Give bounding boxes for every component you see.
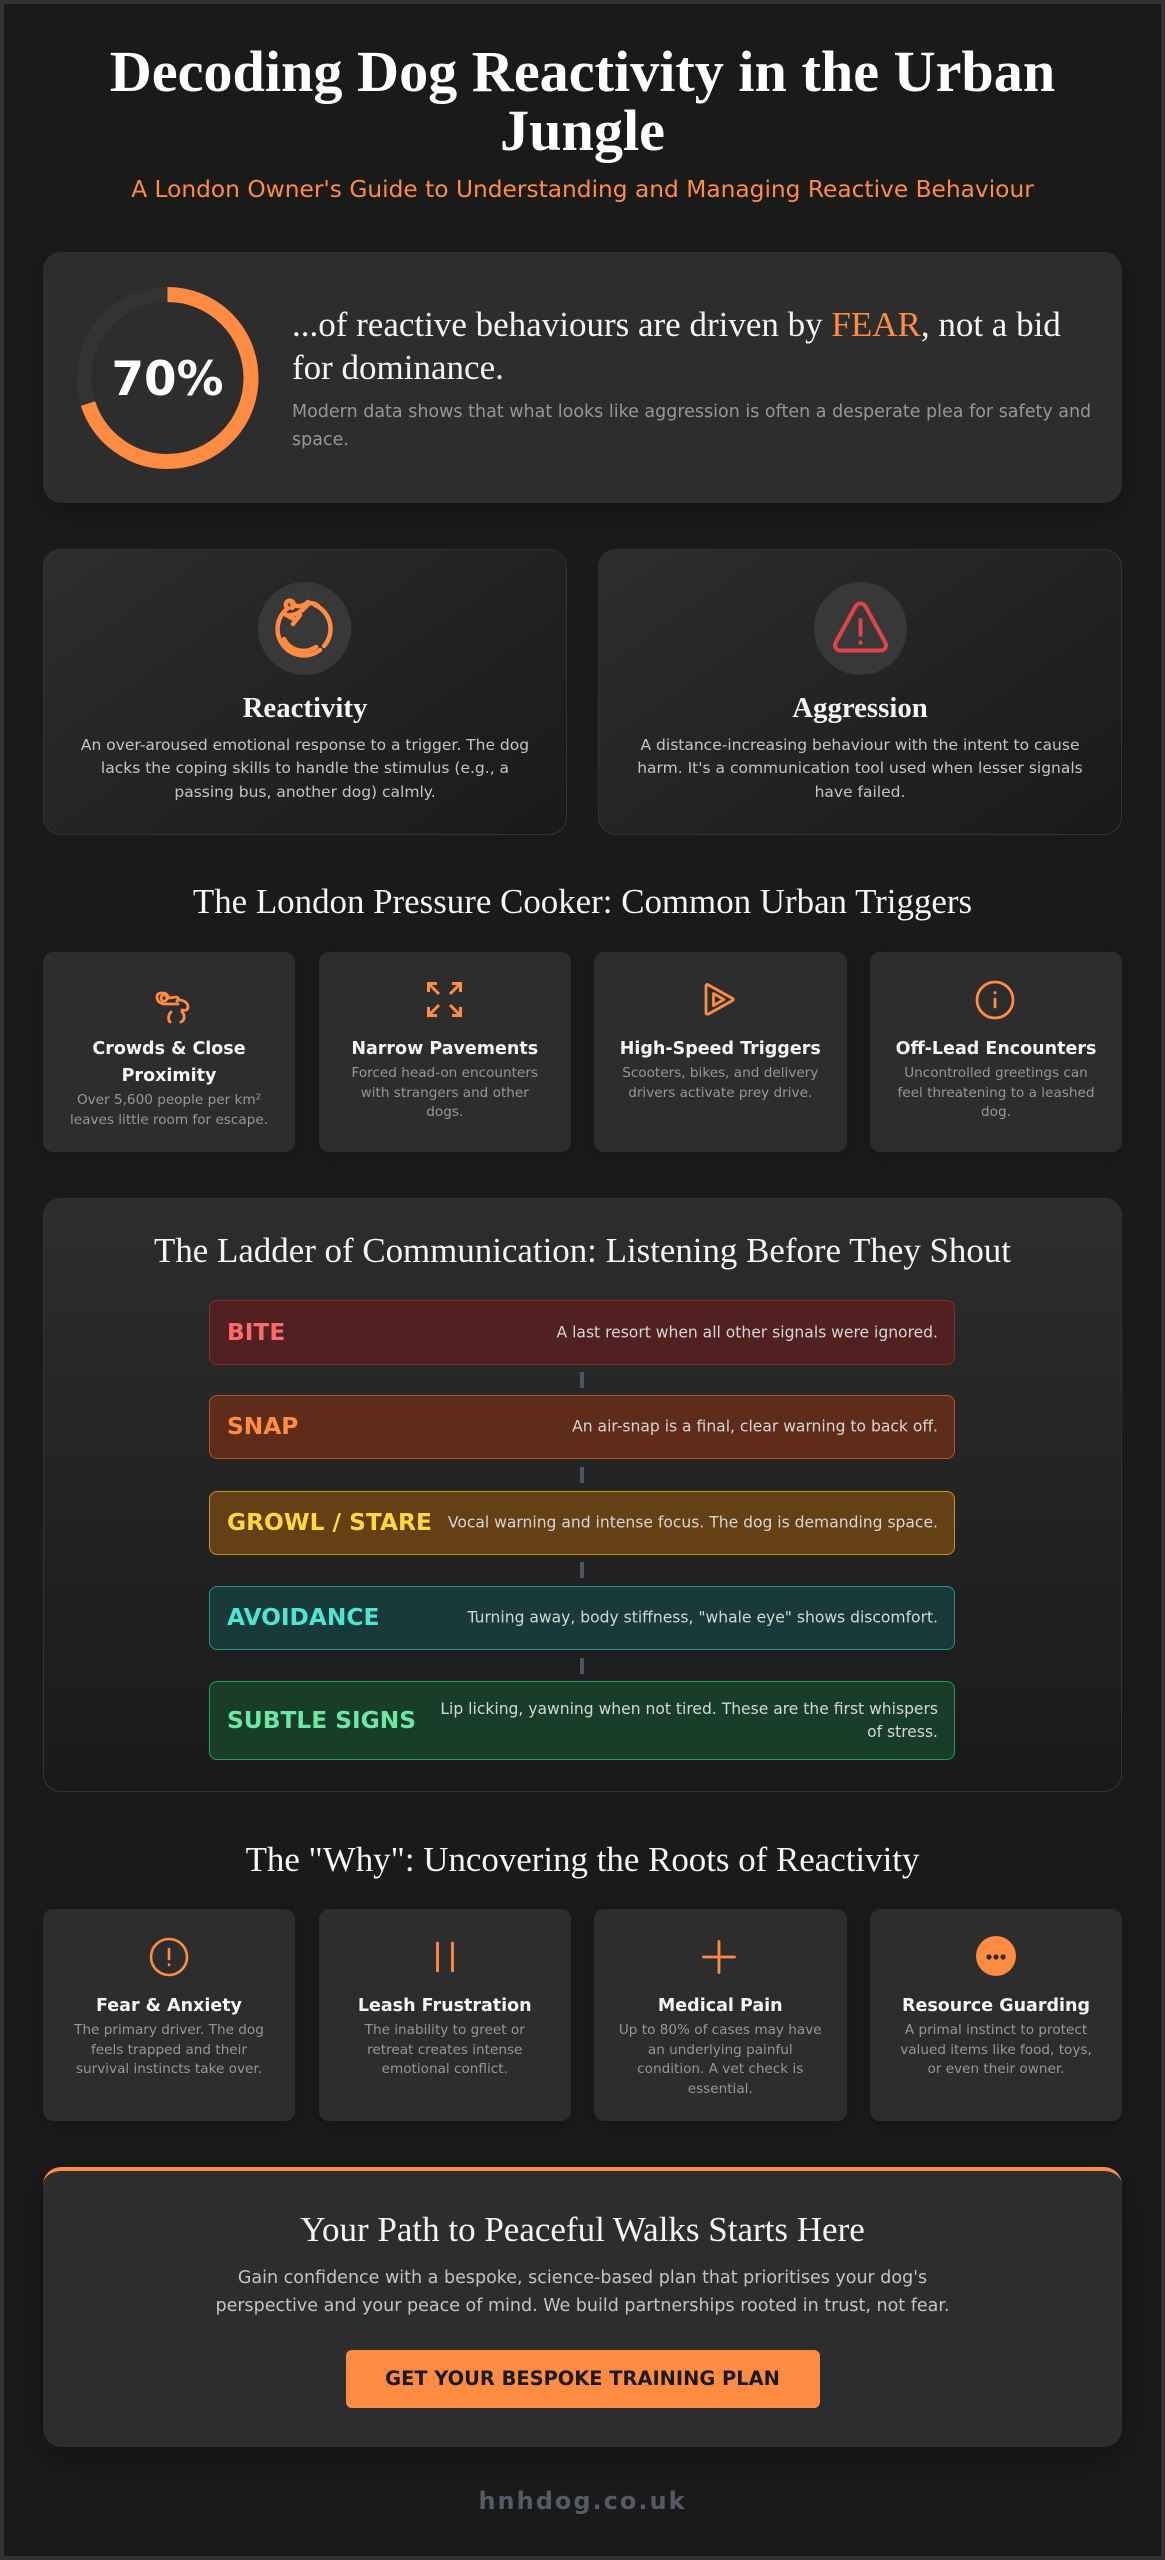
panel: crowds trigger — [43, 952, 295, 1152]
text: off-lead — [898, 1065, 1094, 1120]
description: bite: A last resort when all other signals were ignored. — [557, 1323, 938, 1341]
text: resource: or even their owner. — [927, 2061, 1064, 2077]
text: aggression definition: A distance-increasing behaviour with the intent to cause — [641, 736, 1079, 754]
text: cta: Gain confidence with a bespoke, science-based plan that prioritises your dog's — [238, 2268, 927, 2288]
text: leash: emotional conflict. — [382, 2061, 508, 2077]
text: reactivity definition: lacks the coping skills to handle the stimulus (e.g., a — [101, 759, 509, 777]
heading: cta: Your Path to Peaceful Walks Starts Here — [300, 2210, 865, 2249]
rung: subtle signs — [209, 1681, 955, 1760]
description: subtle signs — [440, 1700, 938, 1740]
connector: growl to avoidance — [580, 1562, 584, 1578]
text: medical: an underlying painful — [648, 2042, 793, 2058]
heading: high-speed: High-Speed Triggers — [620, 1039, 821, 1059]
rung: snap — [209, 1395, 955, 1459]
panel: reactivity — [43, 549, 567, 835]
heading: ladder: The Ladder of Communication: Listening Before They Shout — [154, 1230, 1011, 1270]
panel: medical pain — [594, 1909, 846, 2121]
text: high-speed: Scooters, bikes, and delivery — [622, 1065, 818, 1081]
icon: reactivity — [258, 582, 351, 675]
panel: 70% statistic — [43, 252, 1122, 503]
text: crowds: Over 5,600 people per km² — [77, 1092, 261, 1108]
text: off-lead: Uncontrolled greetings can — [904, 1065, 1088, 1081]
text: pavements — [352, 1065, 538, 1120]
text: pavements: dogs. — [426, 1104, 463, 1120]
icon: dots circle — [976, 1936, 1016, 1976]
text: resource: valued items like food, toys, — [900, 2042, 1092, 2058]
icon: play — [704, 983, 735, 1016]
text: crowds: leaves little room for escape. — [70, 1112, 268, 1128]
icon: exclamation circle — [150, 1938, 188, 1976]
label: growl: GROWL / STARE — [227, 1509, 432, 1536]
text: resource: A primal instinct to protect — [905, 2022, 1087, 2038]
text: fear: The primary driver. The dog — [74, 2022, 264, 2038]
text: cta — [215, 2268, 950, 2316]
chart: 70% donut — [80, 287, 258, 469]
heading: aggression: Aggression — [792, 692, 928, 724]
panel: high-speed trigger — [594, 952, 846, 1152]
label: subtle signs: SUBTLE SIGNS — [227, 1706, 416, 1734]
label: bite: BITE — [227, 1318, 285, 1346]
icon: plus — [702, 1940, 736, 1974]
heading: fear: Fear & Anxiety — [96, 1996, 242, 2016]
heading: crowds — [92, 1039, 246, 1086]
label: avoidance: AVOIDANCE — [227, 1604, 379, 1631]
text: high-speed: drivers activate prey drive. — [628, 1084, 812, 1100]
button — [346, 2350, 820, 2408]
button: GET YOUR BESPOKE TRAINING PLAN — [385, 2367, 780, 2390]
description: avoidance: Turning away, body stiffness, "whale eye" shows discomfort. — [467, 1608, 938, 1626]
description: growl: Vocal warning and intense focus. The dog is demanding space. — [448, 1514, 938, 1532]
text: medical: essential. — [688, 2080, 753, 2096]
heading: pavements: Narrow Pavements — [351, 1039, 538, 1059]
rung: bite — [209, 1300, 955, 1365]
title: Decoding Dog Reactivity in the Urban — [110, 38, 1055, 104]
text: leash: retreat creates intense — [367, 2042, 522, 2058]
rung: avoidance — [209, 1586, 955, 1650]
heading: crowds: Proximity — [122, 1066, 216, 1086]
stat explanation: space. — [292, 430, 349, 450]
stat explanation: Modern data shows that what looks like aggression is often a desperate plea for safety and — [292, 402, 1091, 422]
panel: resource guarding — [870, 1909, 1122, 2121]
text: aggression definition — [637, 736, 1083, 801]
description: snap: An air-snap is a final, clear warning to back off. — [572, 1418, 938, 1436]
text: pavements: with strangers and other — [361, 1084, 529, 1100]
text: reactivity definition — [81, 736, 529, 801]
title: Jungle — [500, 98, 665, 162]
text: reactivity definition: passing bus, another dog) calmly. — [174, 783, 436, 801]
heading: resource: Resource Guarding — [902, 1996, 1090, 2016]
connector: snap to growl — [580, 1467, 584, 1483]
text: off-lead: feel threatening to a leashed — [898, 1084, 1094, 1100]
text: reactivity definition: An over-aroused emotional response to a trigger. The dog — [81, 736, 529, 754]
heading: reactivity: Reactivity — [243, 692, 367, 724]
icon: warning triangle — [814, 582, 907, 675]
text: high-speed — [622, 1065, 818, 1100]
text: off-lead: dog. — [981, 1104, 1011, 1120]
text: leash: The inability to greet or — [365, 2022, 525, 2038]
text: fear: feels trapped and their — [91, 2042, 247, 2058]
rung: growl / stare — [209, 1491, 955, 1555]
stat statement: ...of reactive behaviours are driven by FEAR, not a bid — [292, 304, 1061, 344]
connector: avoidance to subtle — [580, 1658, 584, 1674]
panel: call to action — [43, 2167, 1122, 2447]
text: leash — [364, 2022, 525, 2077]
panel: leash frustration — [318, 1909, 571, 2121]
stat statement — [292, 304, 1061, 387]
heading: off-lead: Off-Lead Encounters — [896, 1039, 1096, 1059]
heading: leash: Leash Frustration — [358, 1996, 532, 2016]
heading: medical: Medical Pain — [658, 1996, 783, 2016]
text: crowds — [70, 1092, 268, 1128]
text: aggression definition: harm. It's a communication tool used when lesser signals — [637, 759, 1083, 777]
stat explanation — [292, 402, 1091, 450]
icon: info — [976, 980, 1014, 1020]
text: resource — [900, 2022, 1092, 2077]
panel: ladder of communication — [43, 1198, 1122, 1792]
description: subtle signs: of stress. — [867, 1722, 938, 1740]
connector: bite to snap — [580, 1372, 584, 1388]
heading: crowds: Crowds & Close — [92, 1039, 246, 1059]
icon: expand arrows — [427, 982, 462, 1017]
text: cta: perspective and your peace of mind. We build partnerships rooted in trust, not fear. — [215, 2296, 950, 2316]
label: snap: SNAP — [227, 1413, 298, 1440]
heading: urban triggers: The London Pressure Cooker: Common Urban Triggers — [193, 882, 972, 921]
icon: pause lines — [436, 1942, 454, 1972]
panel: fear and anxiety — [43, 1909, 295, 2121]
description: subtle signs: Lip licking, yawning when not tired. These are the first whispers — [440, 1700, 938, 1718]
heading: the why: The "Why": Uncovering the Roots of Reactivity — [246, 1840, 919, 1879]
text: fear: survival instincts take over. — [76, 2061, 262, 2077]
stat value: 70% — [111, 352, 224, 406]
text: aggression definition: have failed. — [815, 783, 905, 801]
icon: crowds — [156, 992, 190, 1024]
subtitle: A London Owner's Guide to Understanding and Managing Reactive Behaviour — [131, 176, 1034, 203]
footer: hnhdog.co.uk — [478, 2487, 687, 2515]
text: pavements: Forced head-on encounters — [352, 1065, 538, 1081]
title — [110, 38, 1055, 163]
stat statement: for dominance. — [292, 348, 504, 387]
text: fear — [74, 2022, 264, 2077]
panel: pavements trigger — [318, 952, 571, 1152]
text: medical — [619, 2022, 822, 2096]
panel: aggression — [598, 549, 1122, 835]
panel: off-lead trigger — [870, 952, 1122, 1152]
text: medical: Up to 80% of cases may have — [619, 2022, 822, 2038]
text: medical: condition. A vet check is — [637, 2061, 803, 2077]
